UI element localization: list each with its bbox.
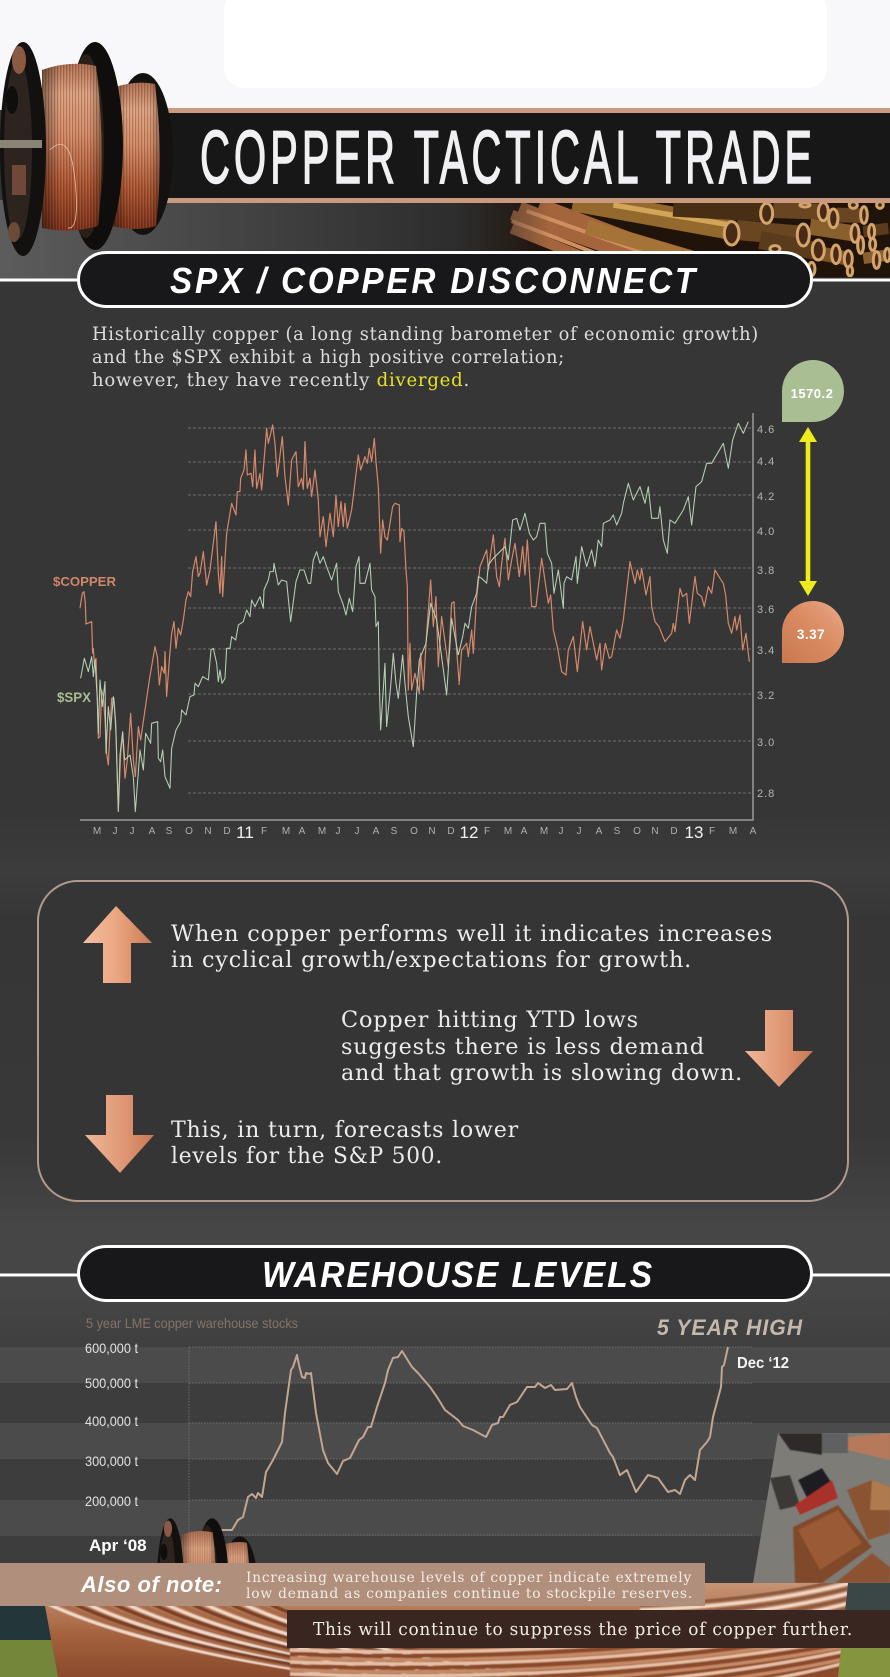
x axis labels [93, 823, 757, 842]
icon: copper wire spool [0, 42, 173, 256]
arrow: yellow divergence [799, 427, 817, 596]
y axis labels: 3.0 [757, 737, 775, 749]
text: copper hitting YTD lows: and that growth is slowing down. [341, 1061, 743, 1086]
y axis labels: 500,000 t [85, 1375, 138, 1391]
x axis labels: J [354, 826, 360, 837]
chart axes [80, 413, 753, 820]
text: warehouse levels note [246, 1570, 693, 1602]
photo: coiled copper wire [0, 1578, 890, 1677]
y axis labels: 2.8 [757, 788, 775, 800]
text: forecasts lower levels [171, 1118, 519, 1169]
callout: SPX value 1570.2: 1570.2 [791, 386, 833, 401]
callout: copper value 3.37: 3.37 [797, 627, 825, 642]
x axis labels: M [729, 826, 737, 837]
x axis labels: M [540, 826, 548, 837]
annotation: 5 year high: 5 YEAR HIGH [657, 1315, 803, 1340]
panel: also of note [0, 1563, 705, 1606]
y axis labels: 4.6 [757, 424, 775, 436]
y axis labels: 3.4 [757, 645, 775, 657]
y axis labels: 4.2 [757, 491, 775, 503]
callout: SPX value 1570.2 [782, 360, 844, 422]
x axis labels: M [504, 826, 512, 837]
line chart: SPX vs copper [53, 413, 775, 842]
series label: copper: $COPPER [53, 574, 117, 589]
y axis labels: 3.6 [757, 604, 775, 616]
x axis labels: O [410, 826, 418, 837]
x axis labels: 11 [236, 823, 254, 842]
x axis labels: D [670, 826, 678, 837]
section heading: SPX / Copper disconnect [78, 252, 812, 306]
panel: copper implications [38, 881, 848, 1201]
warehouse line [213, 1347, 728, 1532]
intro text block [92, 324, 759, 391]
x axis labels: D [223, 826, 231, 837]
x axis labels: A [750, 826, 757, 837]
icon: down arrow left [85, 1095, 154, 1173]
x axis labels: A [521, 826, 528, 837]
x axis labels: S [391, 826, 398, 837]
chart subtitle: 5 year LME copper warehouse stocks [86, 1315, 298, 1331]
section heading: SPX / Copper disconnect: SPX / COPPER DISCONNECT [170, 260, 698, 301]
y axis labels: 4.0 [757, 526, 775, 538]
banner: conclusion: This will continue to suppress the price of copper further. [313, 1619, 853, 1640]
text: warehouse levels note: Increasing warehouse levels of copper indicate extremely [246, 1570, 692, 1586]
x axis labels: J [112, 826, 118, 837]
x axis labels: A [299, 826, 306, 837]
annotation: Apr '08: Apr ‘08 [89, 1536, 147, 1555]
text: forecasts lower levels: This, in turn, forecasts lower [171, 1118, 519, 1143]
y axis labels: 4.4 [757, 456, 775, 468]
x axis labels: S [166, 826, 173, 837]
title band [100, 108, 890, 203]
x axis labels: F [709, 826, 715, 837]
y axis labels: 600,000 t [85, 1340, 138, 1356]
text: copper performs well: in cyclical growth/expectations for growth. [171, 948, 692, 973]
y axis labels [757, 424, 775, 800]
text: copper performs well: When copper performs well it indicates increases [171, 922, 773, 947]
x axis labels: S [614, 826, 621, 837]
callout: copper value 3.37 [782, 601, 844, 663]
section heading: warehouse levels [78, 1246, 812, 1300]
text: forecasts lower levels: levels for the S&P 500. [171, 1144, 443, 1169]
section divider line [0, 1274, 890, 1276]
x axis labels: A [373, 826, 380, 837]
x axis labels: F [261, 826, 267, 837]
chart gridlines [188, 428, 753, 793]
center and right strands [289, 1648, 841, 1677]
series label: SPX: $SPX [57, 689, 92, 705]
chart bands [0, 1347, 890, 1586]
x axis labels: N [428, 826, 436, 837]
icon: down arrow right [745, 1010, 813, 1087]
intro text block: however, they have recently diverged. [92, 370, 470, 391]
x axis labels: 13 [685, 823, 703, 842]
annotation: Dec '12: Dec ‘12 [737, 1355, 789, 1372]
x axis labels: J [576, 826, 582, 837]
wire strands [40, 1578, 850, 1677]
x axis labels: M [282, 826, 290, 837]
copper pipes photo [454, 200, 890, 277]
x axis labels: O [633, 826, 641, 837]
photo: warehouse forklift and copper crates [750, 1430, 890, 1586]
x axis labels: 12 [460, 823, 478, 842]
label: also of note: Also of note: [80, 1572, 222, 1597]
y axis labels: 300,000 t [85, 1453, 138, 1469]
text: copper hitting YTD lows: Copper hitting YTD lows [341, 1008, 639, 1033]
y axis labels: 3.2 [757, 690, 775, 702]
banner: conclusion [287, 1610, 890, 1648]
x axis labels: M [318, 826, 326, 837]
x axis labels: F [484, 826, 490, 837]
y axis labels: 3.8 [757, 565, 775, 577]
y axis labels: 400,000 t [85, 1413, 138, 1429]
intro text block: and the $SPX exhibit a high positive correlation; [92, 347, 565, 368]
section divider line [0, 278, 890, 282]
x axis labels: J [336, 826, 340, 837]
x axis labels: A [596, 826, 603, 837]
section heading: warehouse levels: WAREHOUSE LEVELS [262, 1254, 654, 1295]
x axis labels: N [651, 826, 659, 837]
intro text block: Historically copper (a long standing barometer of economic growth) [92, 324, 759, 345]
y axis labels: 200,000 t [85, 1493, 138, 1509]
x axis labels: D [447, 826, 455, 837]
x axis labels: J [130, 826, 134, 837]
copper line [80, 425, 749, 810]
icon: up arrow [83, 906, 152, 983]
x axis labels: O [185, 826, 193, 837]
x axis labels: J [558, 826, 564, 837]
SPX line [81, 422, 748, 812]
x axis labels: N [204, 826, 212, 837]
x axis labels: M [93, 826, 101, 837]
text: copper hitting YTD lows: suggests there is less demand [341, 1035, 705, 1060]
icon: small copper spool [158, 1518, 256, 1563]
text: copper hitting YTD lows [341, 1008, 743, 1086]
x axis labels: A [149, 826, 156, 837]
y axis labels [85, 1340, 138, 1509]
blank white panel at top [224, 0, 827, 88]
text: warehouse levels note: low demand as companies continue to stockpile reserves. [246, 1586, 693, 1602]
text: copper performs well [171, 922, 773, 973]
line chart: warehouse stocks [0, 1315, 890, 1586]
